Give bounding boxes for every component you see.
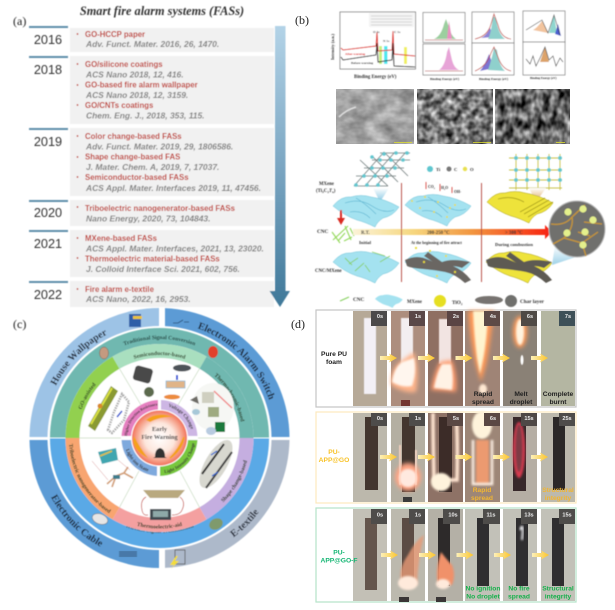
diagram: MXene combustion mechanism bbox=[315, 151, 605, 308]
time badges: 1s bbox=[415, 314, 421, 320]
time badges: 10s bbox=[448, 512, 458, 518]
charts: high resolution XPS panels: Binding Energy (eV) bbox=[430, 77, 459, 81]
charts: high resolution XPS panels: Binding Energy (eV) bbox=[479, 77, 508, 81]
photos: PU-APP@GO burn sequence bbox=[353, 411, 575, 502]
legend: materials: CNC bbox=[353, 297, 364, 303]
chart: XPS survey spectrum: O 1s bbox=[373, 30, 380, 34]
row 2020 bbox=[29, 200, 274, 226]
label: released gases: H₂O bbox=[441, 186, 448, 190]
row 2021: ACS Appl. Mater. Interfaces, 2021, 13, 23020. bbox=[85, 244, 264, 254]
captions: No ignition bbox=[466, 586, 500, 592]
row 2019 bbox=[29, 128, 274, 196]
photos: pure PU burn sequence bbox=[353, 311, 575, 406]
ring labels: Electronic Cable bbox=[50, 494, 103, 547]
captions: Rapid bbox=[473, 487, 491, 494]
label: released gases: OH· bbox=[454, 190, 461, 194]
diagram: MXene combustion mechanism: (Ti bbox=[316, 189, 322, 194]
lattice: oxidised crystal structure bbox=[509, 154, 562, 190]
row 2021: J. Colloid Interface Sci. 2021, 602, 756. bbox=[86, 264, 240, 274]
row 2: PU-APP@GO bbox=[316, 411, 576, 503]
photos: PU-APP@GO-F burn sequence bbox=[353, 509, 575, 602]
row 2022 bbox=[29, 281, 274, 307]
panel label b: (b) bbox=[295, 13, 309, 27]
chart: XPS survey spectrum: C 1s bbox=[394, 30, 401, 34]
label: CNC/MXene: CNC/MXene bbox=[315, 269, 342, 274]
time badges: 15s bbox=[524, 416, 534, 422]
label: released gases bbox=[426, 182, 461, 194]
row 2020: 2020 bbox=[34, 206, 62, 220]
inner ring segments: Higher Detection Resistance bbox=[124, 403, 158, 436]
captions bbox=[466, 586, 574, 600]
chart: XPS survey spectrum: Intensity (a.u.) bbox=[330, 33, 335, 60]
method ring sectors: Triboelectric nanogenerator-based bbox=[68, 443, 112, 514]
icon: alarm light bbox=[208, 346, 218, 358]
chart: XPS survey spectrum: After-warning bbox=[345, 52, 366, 56]
ring labels: Electronic Alarm Switch bbox=[198, 322, 275, 400]
time badges: 0s bbox=[377, 512, 383, 518]
illustration: shape change device bbox=[193, 435, 239, 493]
icon: electronic cable bbox=[119, 552, 137, 556]
diagram: MXene combustion mechanism: ) bbox=[334, 189, 336, 194]
time badges bbox=[371, 413, 575, 426]
row 2021: 2021 bbox=[34, 237, 62, 251]
method ring sectors: GO-assisted bbox=[78, 382, 96, 410]
arrow: timeline direction bbox=[270, 26, 290, 307]
time badges: 4s bbox=[490, 314, 496, 320]
captions: Melt bbox=[514, 391, 528, 398]
temperature labels: R.T. bbox=[361, 231, 370, 236]
method ring sectors: Shape change-based bbox=[220, 460, 248, 502]
captions bbox=[471, 487, 574, 502]
time badges bbox=[371, 311, 575, 326]
charts: high resolution XPS panels bbox=[423, 11, 565, 81]
arrow: CNC addition bbox=[337, 210, 345, 225]
ring labels: House Wallpaper bbox=[50, 330, 106, 386]
sheets: bottom row bbox=[333, 247, 552, 283]
temperature labels bbox=[359, 231, 533, 247]
title: Smart fire alarm systems (FASs) bbox=[80, 4, 244, 18]
row 2022: ACS Nano, 2022, 16, 2953. bbox=[85, 294, 191, 304]
illustration: GO-assisted device bbox=[88, 386, 129, 433]
method ring sectors: Thermoelectric-aid bbox=[137, 522, 182, 530]
CNC fibres bbox=[317, 226, 354, 243]
panel d: flame test photographs bbox=[291, 310, 576, 602]
captions: No droplet bbox=[466, 594, 500, 600]
panel label c: (c) bbox=[13, 317, 26, 331]
row 2020: Triboelectric nanogenerator-based FASs bbox=[85, 204, 236, 213]
time badges: 6s bbox=[490, 416, 496, 422]
row 3: PU-APP@GO-F bbox=[316, 508, 576, 602]
dividers: stage separators bbox=[402, 183, 482, 282]
signal ring: Wireless Signal Transmission bbox=[126, 525, 194, 534]
captions bbox=[472, 391, 574, 406]
signal ring: Traditional Signal Conversion bbox=[122, 334, 196, 346]
signal ring bbox=[49, 327, 270, 549]
centre: early fire warning bbox=[132, 410, 187, 466]
charts: high resolution XPS panels: Binding Energy (eV) bbox=[530, 76, 557, 80]
time badges: 1s bbox=[415, 512, 421, 518]
time badges bbox=[371, 509, 575, 524]
row 2018: ACS Nano 2018, 12, 3159. bbox=[85, 90, 188, 100]
time badges: 0s bbox=[377, 416, 383, 422]
row 2021: MXene-based FASs bbox=[85, 234, 158, 243]
image: SEM micrograph 2 bbox=[417, 89, 493, 144]
CNC fibres: CNC bbox=[317, 229, 328, 235]
time badges: 6s bbox=[527, 314, 533, 320]
row 2018: 2018 bbox=[34, 63, 62, 77]
captions: No fire bbox=[508, 586, 530, 592]
row 2016: 2016 bbox=[34, 33, 62, 47]
row 2018: Chem. Eng. J., 2018, 353, 115. bbox=[86, 110, 204, 120]
chart: XPS survey spectrum: Before-warning bbox=[351, 61, 373, 65]
row 2018: GO/CNTs coatings bbox=[85, 101, 154, 110]
legend: materials: MXene bbox=[407, 300, 422, 305]
temperature labels: At the beginning of fire attract bbox=[411, 241, 463, 245]
captions: burnt bbox=[549, 399, 567, 406]
legend: materials: TiO₂ bbox=[452, 300, 463, 306]
captions: spread bbox=[471, 495, 493, 502]
legend: atoms: C bbox=[454, 167, 457, 172]
icon: wireless device bbox=[91, 512, 109, 526]
row 2021: Thermoelectric material-based FASs bbox=[85, 254, 220, 264]
arrows bbox=[380, 354, 548, 362]
row 2021 bbox=[29, 230, 274, 277]
row 2019: Color change-based FASs bbox=[85, 132, 182, 141]
chart: XPS survey spectrum bbox=[330, 12, 416, 80]
icon: people bbox=[207, 516, 225, 532]
time badges: 11s bbox=[486, 512, 496, 518]
captions: droplet bbox=[510, 399, 533, 406]
icon: ear bbox=[100, 347, 108, 359]
captions: Rapid bbox=[474, 391, 492, 398]
row 2019: ACS Appl. Mater. Interfaces 2019, 11, 47456. bbox=[85, 183, 261, 193]
method ring sectors: Semiconductor-based bbox=[133, 350, 186, 360]
label: MXene formula: MXene bbox=[319, 182, 334, 187]
captions: spread bbox=[508, 594, 530, 600]
label: PU-APP@GO-F: PU- bbox=[333, 550, 345, 556]
panel label a: (a) bbox=[13, 14, 26, 28]
ring labels: E-textile bbox=[230, 510, 259, 538]
row 2020: Nano Energy, 2020, 73, 104843. bbox=[86, 214, 210, 224]
temperature labels: > 300 °C bbox=[505, 231, 523, 236]
method ring sectors bbox=[64, 344, 254, 533]
label: PU-APP@GO-F: APP@GO-F bbox=[320, 558, 358, 564]
row 2022: 2022 bbox=[34, 288, 62, 302]
row 2016: GO-HCCP paper bbox=[85, 30, 145, 39]
temperature labels: Initial bbox=[359, 240, 372, 245]
MXene sheets: top row bbox=[333, 192, 553, 227]
panel a: timeline of fire alarm systems bbox=[13, 4, 290, 307]
label: PU-APP@GO: APP@GO bbox=[319, 457, 349, 464]
icon: wallpaper roll bbox=[129, 314, 142, 327]
image: SEM micrograph 3 bbox=[495, 89, 570, 144]
legend: atoms: Ti bbox=[436, 167, 441, 172]
icon: switch bbox=[173, 320, 189, 323]
row 2016: Adv. Funct. Mater. 2016, 26, 1470. bbox=[85, 39, 219, 49]
time badges: 13s bbox=[524, 512, 534, 518]
panel label d: (d) bbox=[291, 317, 305, 331]
centre: early fire warning: Fire Warning bbox=[141, 434, 179, 441]
row 2019: J. Mater. Chem. A, 2019, 7, 17037. bbox=[86, 162, 219, 172]
label: released gases: CO₂ bbox=[428, 185, 436, 189]
legend: atoms: O bbox=[470, 167, 474, 172]
image: SEM micrograph 1 bbox=[336, 89, 414, 144]
panel b: characterisation and mechanism bbox=[295, 11, 605, 308]
time badges: 15s bbox=[562, 512, 572, 518]
row 2018 bbox=[29, 56, 274, 124]
legend: materials: Char layer bbox=[520, 299, 545, 305]
temperature labels: 200-250 °C bbox=[427, 231, 450, 236]
label: pure PU foam: Pure PU bbox=[321, 351, 347, 358]
callout: char layer magnification bbox=[549, 201, 605, 265]
temperature labels: During combustion bbox=[495, 242, 533, 247]
diagram: MXene combustion mechanism: 2 bbox=[327, 190, 329, 194]
arrows bbox=[380, 452, 548, 462]
row 2019: Shape change-based FAS bbox=[85, 152, 180, 162]
time badges: 7s bbox=[565, 314, 571, 320]
row 2018: GO/silicone coatings bbox=[85, 60, 163, 69]
time badges: 0s bbox=[377, 314, 383, 320]
captions: Structural bbox=[542, 487, 574, 494]
diagram: MXene combustion mechanism: T bbox=[329, 189, 333, 194]
icon: e-textile shirt with lightning bbox=[170, 550, 185, 569]
row 2019: 2019 bbox=[34, 135, 62, 149]
captions: spread bbox=[472, 399, 494, 406]
panel c: circular overview of early fire warning bbox=[12, 307, 290, 569]
inner ring segments: Light-ion State bbox=[126, 448, 149, 472]
captions: integrity bbox=[545, 594, 571, 600]
method ring sectors: Thermochromic-based bbox=[214, 372, 245, 422]
row 2019: Semiconductor-based FASs bbox=[85, 173, 189, 182]
diagram: MXene combustion mechanism: x bbox=[332, 190, 334, 194]
legend: atoms bbox=[427, 166, 474, 172]
illustration: thermoelectric circuit bbox=[142, 490, 185, 520]
time badges: 5s bbox=[453, 416, 459, 422]
captions: Structural bbox=[542, 586, 574, 592]
diagram: MXene combustion mechanism: C bbox=[324, 189, 328, 194]
row 1: pure PU foam bbox=[316, 310, 576, 407]
diagram: MXene combustion mechanism: 3 bbox=[322, 190, 324, 194]
centre: early fire warning: Early bbox=[152, 426, 168, 433]
label: pure PU foam: foam bbox=[326, 359, 342, 366]
callout wedges bbox=[373, 188, 389, 202]
ring labels bbox=[50, 322, 275, 547]
captions: integrity bbox=[545, 495, 571, 502]
chart: XPS survey spectrum: N 1s bbox=[383, 39, 390, 43]
time badges: 1s bbox=[415, 416, 421, 422]
time badges: 2s bbox=[453, 314, 459, 320]
illustration: thermochromic samples bbox=[190, 383, 234, 435]
chart: XPS survey spectrum: Binding Energy (eV) bbox=[354, 75, 397, 80]
arrows bbox=[381, 550, 549, 560]
arrow: temperature gradient bbox=[353, 225, 552, 239]
row 2016 bbox=[29, 26, 274, 52]
legend: materials bbox=[340, 295, 545, 308]
inner ring segments bbox=[121, 400, 198, 477]
row 2018: ACS Nano 2018, 12, 416. bbox=[85, 70, 184, 80]
captions: Complete bbox=[543, 391, 573, 398]
inner ring segments: Light Intensity Change bbox=[164, 442, 196, 474]
illustration: triboelectric runner bbox=[92, 448, 133, 487]
row 2019: Adv. Funct. Mater. 2019, 29, 1806586. bbox=[85, 142, 233, 152]
row 2022: Fire alarm e-textile bbox=[85, 285, 155, 294]
lattice: MXene crystal structure bbox=[354, 151, 410, 187]
row 2018: GO-based fire alarm wallpaper bbox=[85, 80, 198, 90]
outer ring quadrants bbox=[30, 308, 290, 568]
label: PU-APP@GO: PU- bbox=[328, 449, 340, 456]
time badges: 25s bbox=[562, 416, 572, 422]
illustration: semiconductor sensor bbox=[132, 364, 191, 400]
inner ring segments: Voltage Change bbox=[168, 403, 194, 430]
